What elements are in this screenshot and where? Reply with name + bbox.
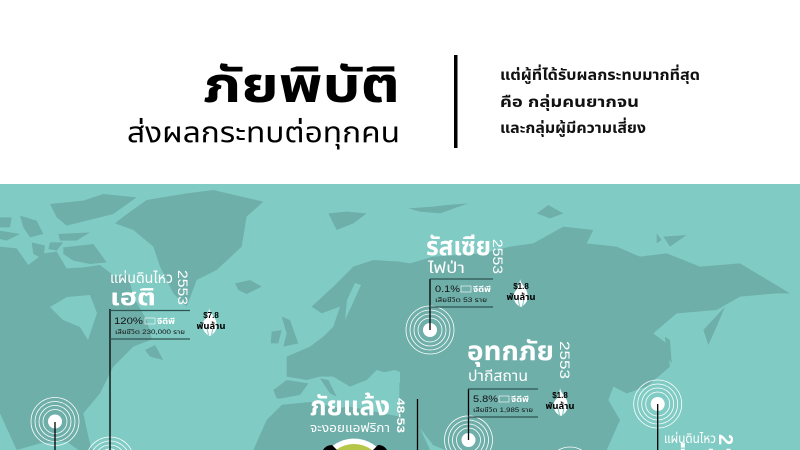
panel: Russia wildfire: รัสเซีย [426,231,491,261]
ring marker: USA [31,398,79,446]
panel: Haiti earthquake: พันล้าน [196,321,226,331]
panel: Pakistan flood [467,336,575,417]
header divider [454,55,458,148]
panel: Russia wildfire: 2553 [490,239,506,274]
marker dot: Pakistan [462,433,476,447]
panel: Pakistan flood: อุทกภัย [467,336,554,367]
panel: Japan earthquake [664,431,736,450]
panel: Russia wildfire: พันล้าน [506,292,536,302]
panel: Russia wildfire: เสียชีวิต 53 ราย [435,296,487,304]
panel: Russia wildfire [426,231,536,307]
panel: Pakistan flood: 2553 [557,341,573,379]
panel: Pakistan flood: $1.8 [552,391,568,400]
panel: Russia wildfire: จีดีพี [472,284,491,294]
ring marker: Pakistan [445,416,492,450]
panel: Pakistan flood: พันล้าน [546,401,575,411]
map background [0,184,800,450]
panel: Japan earthquake: แผ่นดินไหว [664,431,716,446]
panel: Russia wildfire: 0.1% [435,284,460,294]
title: ภัยพิบัติ [203,59,400,113]
panel: Haiti earthquake: เฮติ [110,284,156,310]
panel: Haiti earthquake: เสียชีวิต 230,000 ราย [115,328,185,336]
panel: Horn of Africa drought: จะงอยแอฟริกา [310,421,390,435]
header note: และกลุ่มผู้มีความเสี่ยง [500,117,646,138]
drought badge [323,439,387,450]
ring marker: Japan [634,380,682,428]
panel: Pakistan flood: จีดีพี [510,394,529,404]
world map land [0,190,790,450]
panel: Horn of Africa drought [310,391,406,435]
header note: แต่ผู้ที่ได้รับผลกระทบมากที่สุด [500,64,700,85]
panel: Haiti earthquake: จีดีพี [156,316,175,326]
ring marker: Russia [406,306,454,354]
panel: Horn of Africa drought: 48-53 [394,398,406,433]
ring marker: Asia [558,447,582,450]
panel: Haiti earthquake: $7.8 [203,311,219,320]
ring marker: Haiti [89,437,131,450]
header background [0,0,800,184]
panel: Haiti earthquake: 120% [114,316,143,326]
seas: Hudson Bay, Baltic, Mediterranean, Black Sea, Red Sea [50,283,445,450]
panel: Haiti earthquake: แผ่นดินไหว [110,269,173,287]
marker stems [55,279,658,450]
header note: คือ กลุ่มคนยากจน [500,93,639,111]
panel: Pakistan flood: เสียชีวิต 1,985 ราย [473,406,533,414]
header note [500,64,700,138]
panel: Japan earthquake: 2 [714,434,736,445]
panel: Russia wildfire: $1.8 [513,282,529,291]
panel: Haiti earthquake [110,269,226,339]
panel: Pakistan flood: 5.8% [473,394,498,404]
panel: Haiti earthquake: 2553 [175,270,191,305]
subtitle: ส่งผลกระทบต่อทุกคน [127,117,400,149]
panel: Russia wildfire: ไฟป่า [427,260,465,277]
panel: Pakistan flood: ปากีสถาน [468,368,528,385]
panel: Horn of Africa drought: ภัยแล้ง [310,391,390,421]
